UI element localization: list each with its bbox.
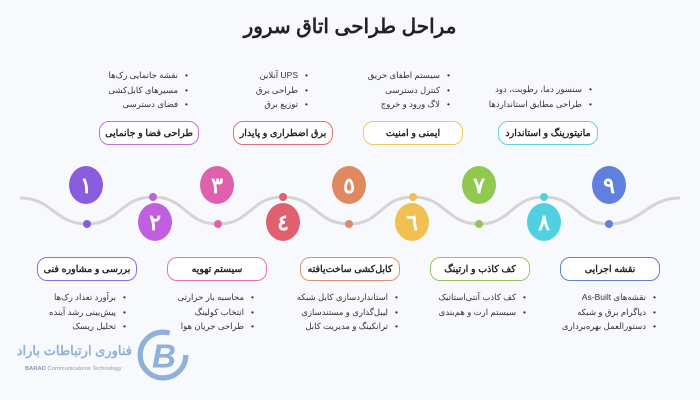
- box: consulting: بررسی و مشاوره فنی: [44, 264, 130, 274]
- list: cooling: انتخاب کولینگ: [195, 306, 244, 316]
- box: consulting: [37, 257, 137, 281]
- list: consulting: پیش‌بینی رشد آینده: [49, 306, 116, 316]
- list: cabling: لیبل‌گذاری و مستندسازی: [301, 306, 388, 316]
- timeline wave with numbered circles: ٧: [472, 173, 485, 198]
- list: power: UPS آنلاین: [260, 70, 298, 80]
- logo: [17, 330, 188, 380]
- logo: فناوری ارتباطات باراد: [17, 343, 132, 358]
- list: monitoring: طراحی مطابق استانداردها: [489, 98, 582, 108]
- list: power: طراحی برق: [256, 84, 298, 94]
- box: cabling: کابل‌کشی ساخت‌یافته: [308, 264, 392, 274]
- list: monitoring: سنسور دما، رطوبت، دود: [495, 84, 582, 94]
- box: space layout: [99, 121, 199, 145]
- list: safety: [368, 70, 450, 110]
- timeline wave with numbered circles: ٨: [537, 210, 550, 235]
- list: raised floor: سیستم ارت و هم‌بندی: [439, 306, 516, 316]
- list: monitoring: [489, 84, 592, 110]
- icon: logo mark: B: [152, 338, 176, 375]
- box: raised floor: [430, 257, 530, 281]
- box: cabling: [300, 257, 400, 281]
- list: consulting: تحلیل ریسک: [72, 321, 116, 331]
- box: cooling: [167, 257, 267, 281]
- box: safety: [363, 121, 463, 145]
- list: space layout: [108, 70, 188, 110]
- list: raised floor: [438, 292, 526, 318]
- list: safety: لاگ ورود و خروج: [381, 99, 440, 109]
- list: space layout: نقشه جانمایی رک‌ها: [109, 70, 178, 80]
- list: consulting: [49, 292, 126, 332]
- list: cabling: [297, 292, 398, 332]
- box: plans: نقشه اجرایی: [585, 264, 635, 274]
- box: power: برق اضطراری و پایدار: [240, 128, 326, 138]
- list: cooling: طراحی جریان هوا: [181, 321, 244, 331]
- list: space layout: مسیرهای کابل‌کشی: [108, 84, 178, 94]
- timeline wave with numbered circles: ٢: [149, 210, 161, 235]
- list: raised floor: کف کاذب آنتی‌استاتیک: [438, 292, 516, 302]
- list: power: توزیع برق: [264, 99, 298, 109]
- box: monitoring: مانیتورینگ و استاندارد: [505, 128, 591, 138]
- list: consulting: برآورد تعداد رک‌ها: [54, 292, 116, 302]
- list: safety: سیستم اطفای حریق: [368, 70, 440, 80]
- box: cooling: سیستم تهویه: [192, 264, 242, 274]
- timeline wave with numbered circles: ٣: [211, 173, 223, 198]
- timeline wave with numbered circles: ٦: [406, 210, 418, 235]
- box: power: [233, 121, 333, 145]
- list: cooling: [177, 292, 254, 332]
- list: power: [256, 70, 308, 110]
- list: cabling: استانداردسازی کابل شبکه: [297, 292, 388, 302]
- list: plans: دستورالعمل بهره‌برداری: [562, 321, 646, 331]
- list: plans: نقشه‌های As-Built: [582, 292, 646, 302]
- timeline wave with numbered circles: ٩: [603, 173, 615, 198]
- box: plans: [560, 257, 660, 281]
- timeline wave with numbered circles: ٥: [343, 173, 355, 198]
- title: مراحل طراحی اتاق سرور: [244, 16, 456, 38]
- list: space layout: فضای دسترسی: [123, 99, 178, 109]
- box: monitoring: [498, 121, 598, 145]
- logo: BARAD Communications Technology: [25, 366, 122, 372]
- list: plans: دیاگرام برق و شبکه: [577, 306, 646, 316]
- box: safety: ایمنی و امنیت: [386, 128, 440, 138]
- list: safety: کنترل دسترسی: [385, 84, 440, 94]
- box: raised floor: کف کاذب و ارتینگ: [444, 264, 516, 274]
- icon: logo mark: [138, 330, 188, 380]
- list: cabling: ترانکینگ و مدیریت کابل: [305, 321, 388, 331]
- box: space layout: طراحی فضا و جانمایی: [105, 128, 193, 138]
- list: cooling: محاسبه بار حرارتی: [177, 292, 244, 302]
- timeline wave with numbered circles: ١: [80, 173, 92, 198]
- timeline wave with numbered circles: ٤: [277, 210, 289, 235]
- list: plans: [562, 292, 656, 332]
